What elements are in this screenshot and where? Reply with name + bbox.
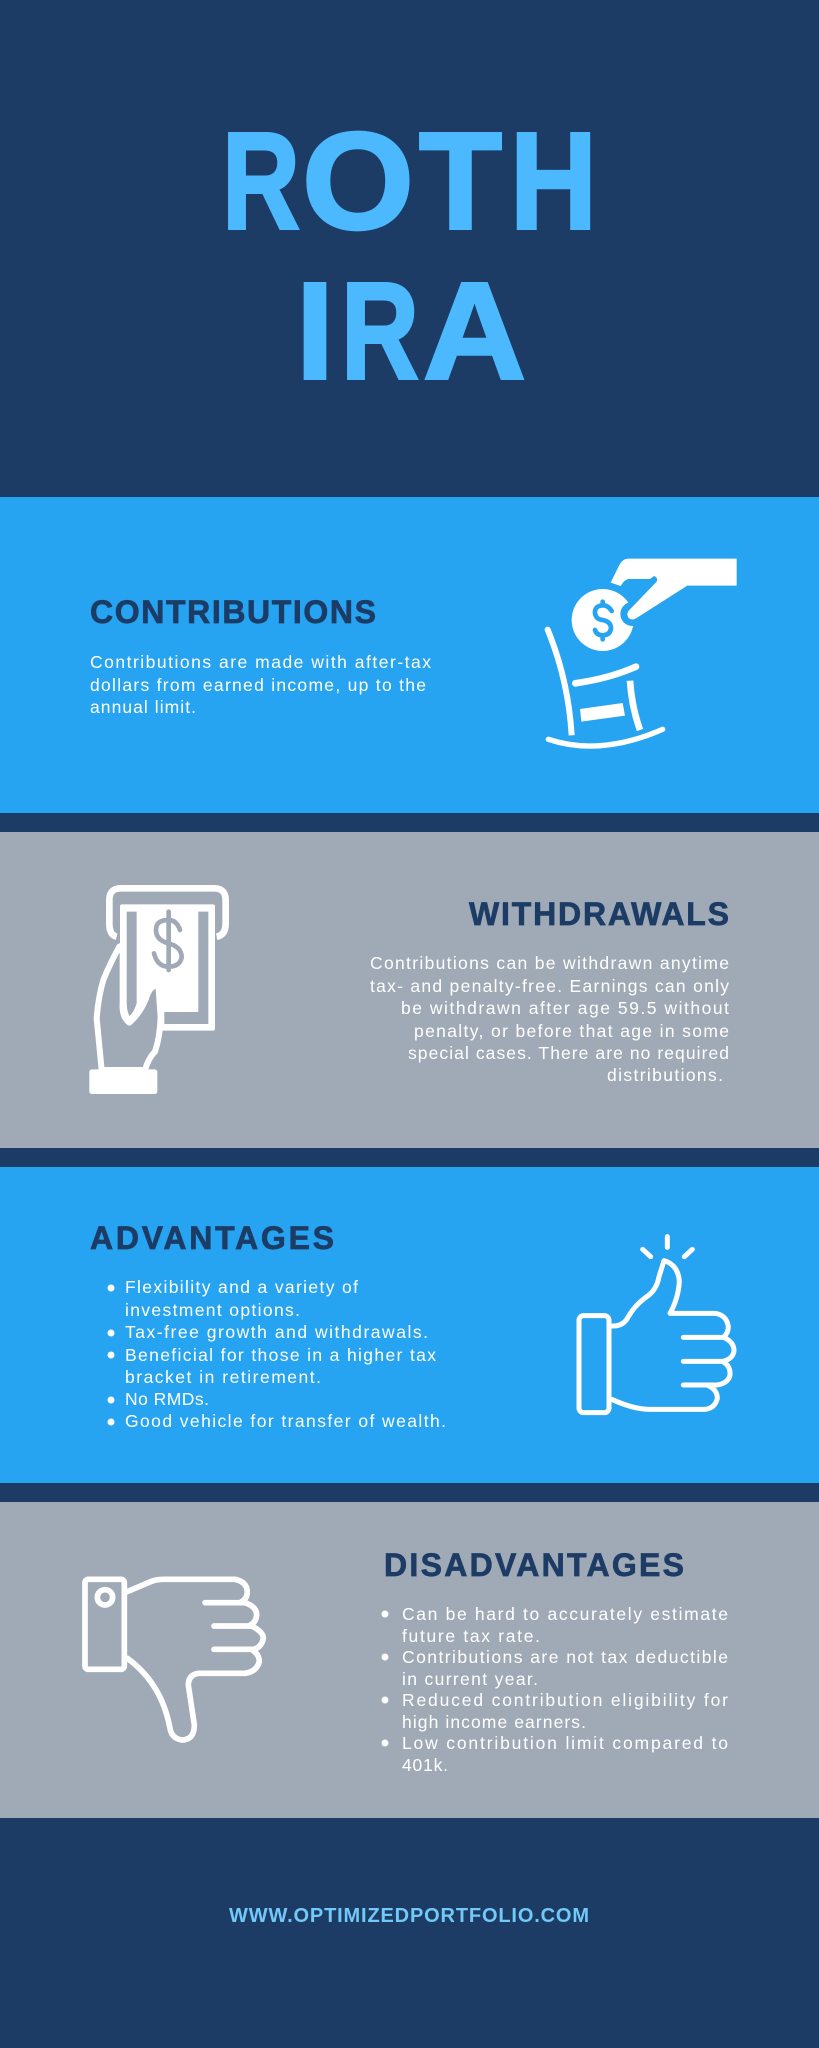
title: A — [423, 254, 526, 408]
text: withdrawals body: special cases. There are no required — [408, 1043, 729, 1063]
list: disadvantages: future tax rate. — [402, 1626, 540, 1646]
list: advantages: Flexibility and a variety of — [125, 1277, 358, 1297]
list: disadvantages: Reduced contribution eligibility for — [402, 1690, 728, 1710]
title: I — [296, 254, 334, 408]
title: R — [222, 104, 300, 258]
text: withdrawals body — [370, 953, 729, 1085]
list: disadvantages: Contributions are not tax deductible — [402, 1647, 728, 1667]
heading: contributions: CONTRIBUTIONS — [90, 594, 376, 630]
panel: advantages — [0, 1167, 819, 1483]
list: advantages: Good vehicle for transfer of wealth. — [125, 1411, 446, 1431]
icon: thumbs down — [85, 1579, 263, 1740]
list: advantages — [108, 1277, 446, 1431]
text: contributions body: dollars from earned income, up to the — [90, 675, 426, 695]
text: withdrawals body: distributions. — [607, 1065, 723, 1085]
list: advantages: bracket in retirement. — [125, 1367, 321, 1387]
heading: disadvantages: DISADVANTAGES — [384, 1547, 684, 1583]
title: T — [419, 104, 502, 258]
title — [222, 104, 597, 408]
list: disadvantages — [382, 1604, 728, 1775]
title: O — [302, 104, 414, 258]
icon: thumbs up — [579, 1237, 734, 1413]
list: disadvantages: Low contribution limit compared to — [402, 1733, 728, 1753]
text: withdrawals body: Contributions can be withdrawn anytime — [370, 953, 729, 973]
text: withdrawals body: tax- and penalty-free. Earnings can only — [370, 976, 729, 996]
title: R — [341, 254, 419, 408]
text: withdrawals body: penalty, or before that age in some — [414, 1021, 729, 1041]
heading: advantages: ADVANTAGES — [90, 1220, 334, 1256]
list: advantages: investment options. — [125, 1300, 300, 1320]
heading: withdrawals: WITHDRAWALS — [469, 896, 729, 932]
panel: withdrawals — [0, 832, 819, 1148]
icon: hand taking cash from atm — [89, 888, 226, 1094]
footer url: WWW.OPTIMIZEDPORTFOLIO.COM — [229, 1905, 589, 1927]
list: disadvantages: high income earners. — [402, 1712, 586, 1732]
panel: disadvantages — [0, 1502, 819, 1818]
text: contributions body — [90, 652, 431, 717]
text: withdrawals body: be withdrawn after age 59.5 without — [401, 998, 729, 1018]
list: disadvantages: in current year. — [402, 1669, 538, 1689]
text: contributions body: Contributions are made with after-tax — [90, 652, 431, 672]
panel: contributions — [0, 497, 819, 813]
title: H — [510, 104, 597, 258]
icon: hand dropping coin into rocking chair — [545, 559, 737, 746]
list: advantages: Beneficial for those in a higher tax — [125, 1345, 436, 1365]
list: advantages: No RMDs. — [125, 1389, 209, 1409]
list: advantages: Tax-free growth and withdrawals. — [125, 1322, 428, 1342]
list: disadvantages: Can be hard to accurately estimate — [402, 1604, 728, 1624]
text: contributions body: annual limit. — [90, 697, 196, 717]
list: disadvantages: 401k. — [402, 1755, 448, 1775]
